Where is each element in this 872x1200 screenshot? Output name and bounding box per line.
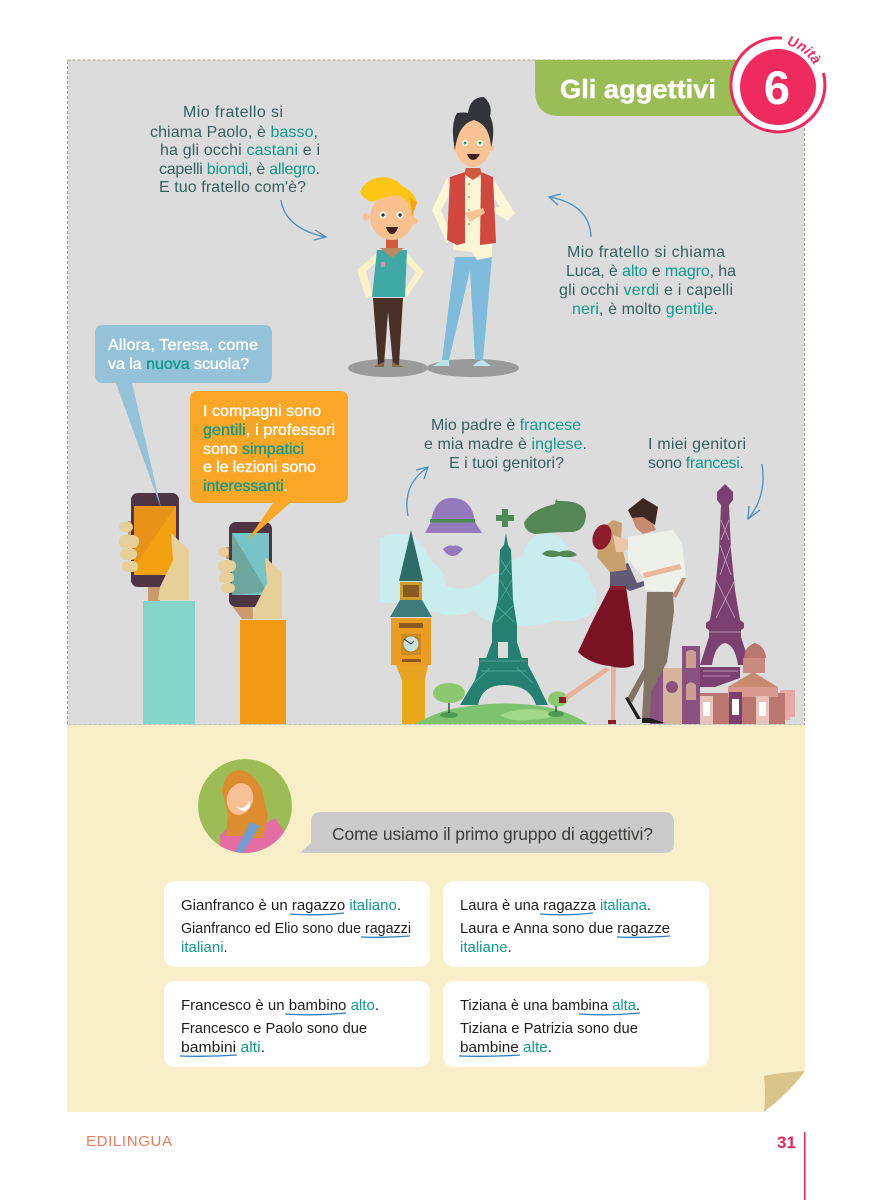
text block: parents French and English <box>424 417 587 472</box>
text block: Paolo description: chiama Paolo, è basso, <box>150 124 318 141</box>
speech bubble: orange answer: e le lezioni sono <box>203 459 316 476</box>
speech bubble: blue question: va la nuova scuola? <box>108 356 249 373</box>
speech bubble: orange answer: gentili, i professori <box>203 422 335 439</box>
card: bambino: Francesco e Paolo sono due <box>181 1020 367 1037</box>
card: bambina: Tiziana e Patrizia sono due <box>460 1020 638 1037</box>
speech bubble: orange answer: interessanti. <box>203 478 288 495</box>
text block: Paolo description <box>150 104 320 196</box>
illustration: purple Eiffel tower <box>700 484 750 687</box>
speech bubble: orange answer: sono simpatici <box>203 441 304 458</box>
card: ragazzo: Gianfranco è un ragazzo italiano. <box>181 897 401 914</box>
text block: French parents: I miei genitori <box>648 436 746 453</box>
footer: page number: 31 <box>777 1133 796 1152</box>
card: bambino: Francesco è un bambino alto. <box>181 997 379 1014</box>
phone hand: right <box>218 522 286 724</box>
speech bubble: grammar question: Come usiamo il primo gruppo di aggettivi? <box>332 824 653 844</box>
card: ragazzo: Gianfranco ed Elio sono due ragazzi <box>181 920 411 937</box>
avatar: girl portrait <box>198 759 292 853</box>
illustration: tall man Luca <box>427 97 519 377</box>
text block: parents French and English: e mia madre è inglese. <box>424 436 587 453</box>
heading: title banner: Gli aggettivi <box>560 74 716 104</box>
text block: Luca description: Mio fratello si chiama <box>567 244 725 261</box>
arrow: question to big ben <box>407 467 428 516</box>
illustration: couple <box>559 498 686 724</box>
footer: publisher name: EDILINGUA <box>86 1133 172 1150</box>
text block: Paolo description: Mio fratello si <box>183 104 283 121</box>
card: ragazzo: italiani. <box>181 939 228 956</box>
arrow: Paolo text to boy <box>281 200 326 240</box>
heading: title banner <box>535 60 750 116</box>
illustration: green hill with trees <box>415 683 588 724</box>
illustration: Big Ben <box>390 530 432 724</box>
arrow: answer to couple <box>748 464 763 519</box>
panel: yellow grammar background <box>67 725 805 1112</box>
text block: Paolo description: E tuo fratello com'è? <box>159 179 306 196</box>
text block: Luca description: gli occhi verdi e i capelli <box>559 282 733 299</box>
illustration: Paris buildings <box>650 646 700 724</box>
card: bambino: bambini alti. <box>181 1039 265 1056</box>
card: ragazza: italiane. <box>460 939 512 956</box>
illustration: green Eiffel tower <box>460 533 548 705</box>
text block: Luca description: neri, è molto gentile. <box>572 301 718 318</box>
speech bubble: orange answer: I compagni sono <box>203 403 321 420</box>
text block: French parents: sono francesi. <box>648 455 744 472</box>
panel: grey illustration background <box>68 60 804 725</box>
speech bubble: blue question: Allora, Teresa, come <box>108 337 258 354</box>
icon: folded page corner <box>764 1071 805 1112</box>
arrow: Luca text to man <box>549 194 591 237</box>
card: bambina <box>443 981 709 1067</box>
card: bambina: Tiziana è una bambina alta. <box>460 997 640 1014</box>
text block: Paolo description: capelli biondi, è allegro. <box>159 161 320 178</box>
text block: French parents <box>648 436 746 472</box>
illustration: boy Paolo <box>348 177 428 377</box>
text block: Paolo description: ha gli occhi castani e i <box>160 142 320 159</box>
card: ragazzo <box>164 881 430 967</box>
text block: Luca description: Luca, è alto e magro, ha <box>566 263 736 280</box>
text block: parents French and English: Mio padre è francese <box>431 417 581 434</box>
badge: unit number: Unità <box>788 36 821 65</box>
card: ragazza: Laura è una ragazza italiana. <box>460 897 651 914</box>
card: ragazza: Laura e Anna sono due ragazze <box>460 920 670 937</box>
text block: Luca description <box>559 244 736 318</box>
icon: plus sign <box>496 509 514 527</box>
phone hand: left <box>119 493 195 724</box>
card: ragazza <box>443 881 709 967</box>
text block: parents French and English: E i tuoi genitori? <box>449 455 564 472</box>
speech bubble: orange answer <box>190 391 348 541</box>
speech bubble: blue question <box>95 325 272 508</box>
badge: unit number: 6 <box>764 61 790 114</box>
speech bubble: grammar question <box>300 812 674 853</box>
icon: purple hat and lips <box>425 498 482 556</box>
card: bambino <box>164 981 430 1067</box>
footer: vertical rule <box>804 1132 806 1200</box>
badge: unit number <box>729 36 826 134</box>
icon: green beret and moustache <box>524 499 586 557</box>
illustration: clouds <box>380 533 597 626</box>
illustration: French houses and dome <box>700 643 795 724</box>
card: bambina: bambine alte. <box>460 1039 552 1056</box>
